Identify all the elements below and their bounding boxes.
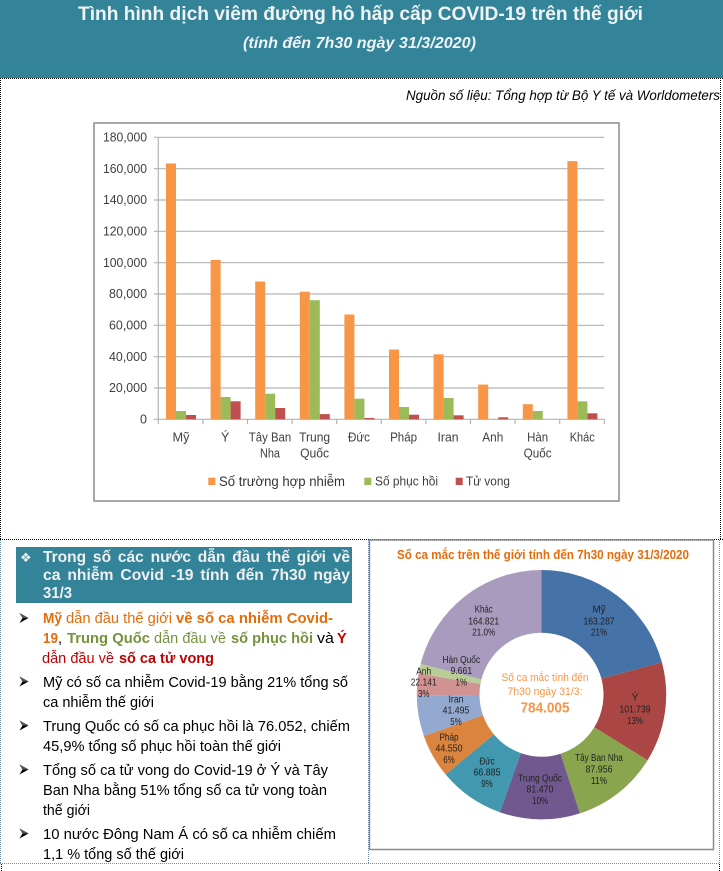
green bars: recovered (176, 300, 587, 419)
donut labels: 5% (450, 716, 462, 728)
legend: Số trường hợp nhiễm (219, 473, 345, 489)
donut labels: 6% (443, 754, 455, 766)
header banner (0, 0, 723, 78)
donut labels: 13% (627, 715, 643, 727)
bullet: Southeast Asia: 10 nước Đông Nam Á có số ca nhiễm chiếm (43, 826, 336, 843)
donut labels: Tây Ban Nha (575, 752, 623, 764)
donut labels: 163.287 (584, 616, 615, 628)
category labels: Quốc (300, 446, 329, 460)
red bars: deaths (186, 401, 597, 419)
donut labels: Anh (416, 666, 431, 678)
legend: Số phục hồi (375, 474, 438, 488)
donut labels: 66.885 (474, 766, 501, 778)
donut labels: 21% (591, 626, 607, 638)
donut chart panel (370, 540, 714, 850)
donut title: Số ca mắc trên thế giới tính đến 7h30 ngày 31/3/2020 (397, 547, 689, 562)
donut labels: Hàn Quốc (442, 654, 480, 666)
bullet: US share (20, 674, 348, 711)
donut labels: Trung Quốc (518, 772, 562, 784)
donut labels: 10% (532, 795, 548, 807)
y axis labels: 80,000 (109, 287, 147, 301)
bullet: China recovered: 45,9% tổng số phục hồi toàn thế giới (43, 739, 281, 755)
category labels: Iran (438, 430, 459, 444)
category labels: Mỹ (172, 430, 190, 444)
y axis labels: 180,000 (103, 130, 147, 144)
donut labels: Đức (480, 756, 494, 768)
category labels: Hàn (527, 430, 548, 444)
donut labels: 9% (481, 778, 493, 790)
donut labels: 81.470 (526, 784, 554, 796)
y axis labels: 40,000 (109, 350, 147, 364)
donut labels: 11% (591, 775, 607, 787)
category labels: Khác (570, 430, 595, 444)
category labels: Ý (221, 430, 230, 444)
donut labels: Khác (475, 604, 493, 616)
bullet: US share: ca nhiễm thế giới (43, 694, 154, 711)
y axis labels: 160,000 (103, 162, 147, 176)
donut center total: 7h30 ngày 31/3: (508, 686, 582, 698)
bullet: leaders: dẫn đầu về (42, 650, 114, 667)
y axis labels: 140,000 (103, 193, 147, 207)
y axis labels: 100,000 (103, 256, 147, 270)
category labels: Tây Ban (249, 430, 291, 444)
category labels: Trung (299, 430, 330, 444)
y axis labels (103, 130, 147, 426)
bullet: Southeast Asia: 1,1 % tổng số thế giới (43, 847, 184, 863)
bullet: China recovered (20, 719, 350, 755)
bullet: leaders: dẫn đầu thế giới (66, 610, 172, 627)
donut labels: 3% (418, 688, 429, 700)
category labels: Quốc (524, 446, 552, 460)
donut slices (417, 570, 666, 819)
section heading: ca nhiễm Covid -19 tính đến 7h30 ngày (43, 567, 350, 584)
donut labels: 87.956 (586, 764, 613, 776)
category labels: Pháp (390, 430, 417, 444)
y axis labels: 0 (140, 412, 147, 426)
donut center total: 784.005 (520, 700, 570, 716)
category labels (172, 430, 595, 460)
legend (208, 473, 510, 489)
section heading: Trong số các nước dẫn đầu thế giới về (43, 549, 350, 566)
bullet: leaders: dẫn đầu về (154, 630, 226, 647)
donut labels: 22.141 (411, 676, 437, 688)
donut center total (502, 671, 588, 716)
orange bars: infected (166, 161, 577, 419)
bullet: leaders: Trung Quốc (67, 631, 150, 647)
legend: Tử vong (466, 474, 510, 488)
category labels: Đức (348, 430, 370, 444)
donut labels: 164.821 (468, 616, 499, 628)
bullet: leaders: Mỹ (43, 611, 62, 627)
bullet: Italy and Spain deaths: thế giới (43, 803, 90, 819)
bullet: leaders: số phục hồi (231, 631, 313, 647)
donut labels: 41.495 (443, 704, 469, 716)
section heading (16, 547, 352, 603)
donut labels: 21.0% (472, 626, 495, 638)
category labels: Anh (482, 430, 503, 444)
donut labels (411, 604, 651, 807)
donut labels: Pháp (440, 732, 459, 744)
section heading: 31/3 (43, 585, 72, 602)
donut center total: Số ca mắc tính đến (502, 671, 588, 684)
bullet: US share: Mỹ có số ca nhiễm Covid-19 bằng 21% tổng số (43, 674, 348, 691)
bullet: leaders: , (58, 631, 62, 647)
y axis labels: 60,000 (109, 318, 147, 332)
bar chart (94, 123, 619, 501)
section heading: ❖ (20, 551, 32, 566)
donut labels: Mỹ (592, 604, 606, 616)
donut labels: 1% (456, 676, 467, 688)
bullet: leaders: Ý (337, 629, 347, 647)
bullet: leaders: 19 (43, 631, 58, 647)
donut labels: 44.550 (436, 742, 463, 754)
bullet: Italy and Spain deaths (20, 762, 329, 819)
bullet: leaders: số ca tử vong (119, 651, 214, 667)
bullet: leaders: về số ca nhiễm Covid- (176, 610, 333, 627)
bullet: Italy and Spain deaths: Tổng số ca tử vong do Covid-19 ở Ý và Tây (43, 762, 329, 779)
bullet: leaders: và (317, 631, 335, 647)
title: Tình hình dịch viêm đường hô hấp cấp COVID-19 trên thế giới (78, 4, 643, 25)
category labels: Nha (260, 446, 280, 460)
donut labels: Ý (631, 690, 639, 704)
y axis labels: 20,000 (109, 381, 147, 395)
bullet: Southeast Asia (20, 826, 336, 863)
panel: key findings (16, 547, 352, 863)
subtitle: (tính đến 7h30 ngày 31/3/2020) (243, 35, 476, 52)
donut labels: 101.739 (620, 704, 651, 716)
donut labels: Iran (448, 694, 464, 706)
donut labels: 9.661 (450, 665, 472, 677)
bullet: Italy and Spain deaths: Ban Nha bằng 51% tổng số ca tử vong toàn (43, 782, 327, 799)
bullet: China recovered: Trung Quốc có số ca phục hồi là 76.052, chiếm (43, 719, 350, 735)
y axis labels: 120,000 (103, 224, 147, 238)
bullet: leaders (20, 610, 347, 667)
